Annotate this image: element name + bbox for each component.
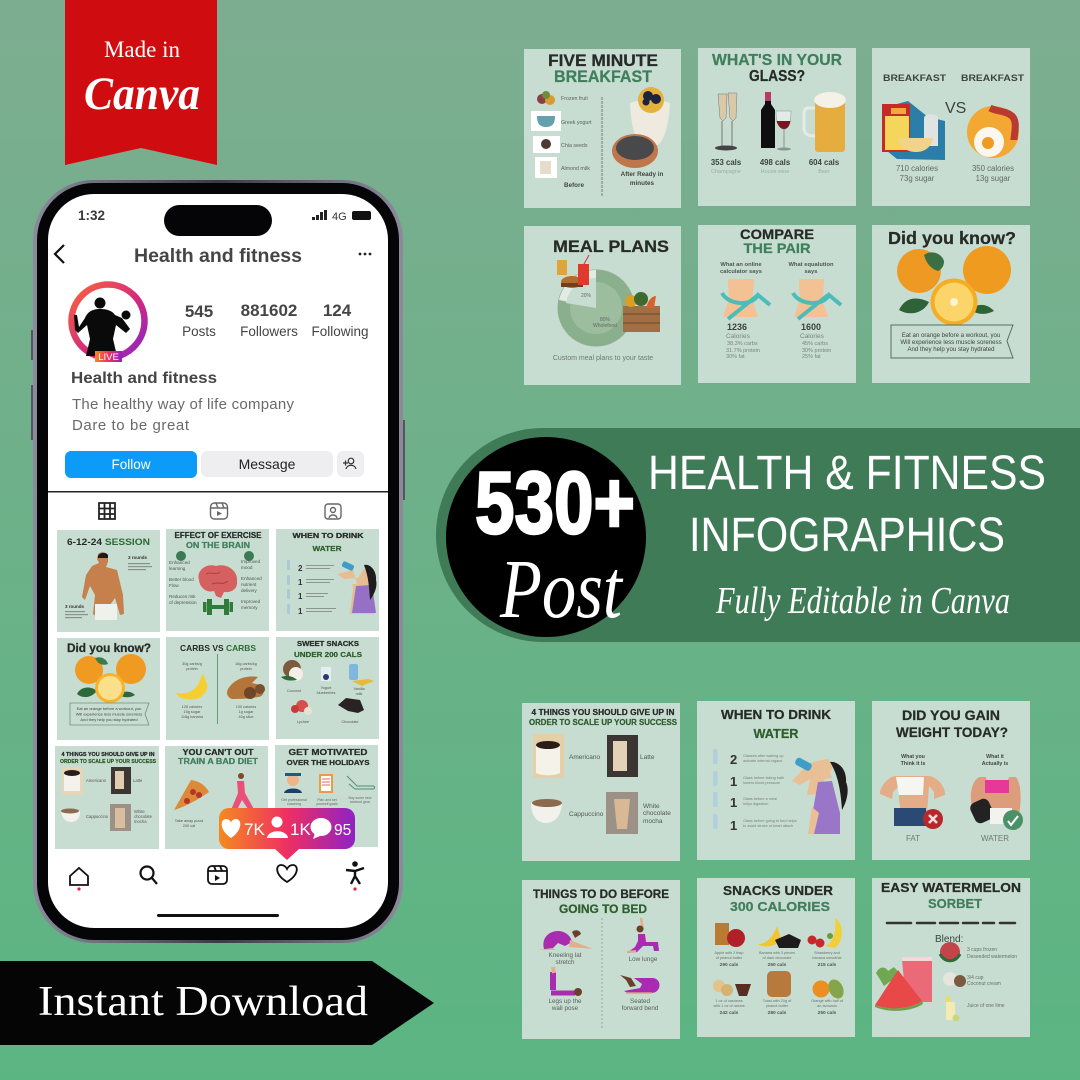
card: things to do before going to bed: forward bend xyxy=(622,1005,659,1012)
tile: carbs vs carbs: protein xyxy=(240,667,252,671)
engagement badge xyxy=(219,808,355,860)
card: breakfast vs breakfast: 13g sugar xyxy=(976,174,1011,183)
card: things to do before going to bed: Kneeling lat xyxy=(549,952,582,959)
black 530+ post badge xyxy=(446,437,646,637)
tile: carbs vs carbs: 100 calories xyxy=(236,705,256,709)
profile stats: 881602 xyxy=(241,301,297,320)
status bar: 1:32 xyxy=(78,208,105,223)
card: what's in your glass: Champagne xyxy=(711,169,741,175)
card: did you know: Eat an orange before a workout, you xyxy=(902,332,1000,339)
card: did you gain weight today: FAT xyxy=(906,834,920,843)
tile: get motivated over the holidays: workout gear xyxy=(350,800,371,804)
card: things to do before going to bed: wall pose xyxy=(551,1005,579,1012)
card: breakfast vs breakfast: BREAKFAST xyxy=(883,73,946,83)
tile: sweet snacks under 200 cals: UNDER 200 CALS xyxy=(294,650,362,659)
card: did you gain weight today: Actually is xyxy=(982,761,1008,767)
card: what's in your glass xyxy=(698,48,856,206)
tile: did you know: And they help you stay hydrated xyxy=(80,717,138,722)
card: compare the pair: calculator says xyxy=(720,269,762,275)
card: compare the pair: 30% protein xyxy=(802,348,831,354)
tile: 6-12-24 session: 3 rounds xyxy=(65,604,84,609)
card: things to do before going to bed: stretch xyxy=(556,959,575,966)
tile: when to drink water: 2 xyxy=(298,564,303,573)
card: did you gain weight today xyxy=(872,701,1030,860)
card: things to do before going to bed: Seated xyxy=(630,998,650,1005)
card: easy watermelon sorbet: SORBET xyxy=(928,896,982,911)
card: snacks under 300 calories: 290 cals xyxy=(720,962,739,968)
phone mockup xyxy=(31,180,405,943)
card: when to drink water: Glass before a meal xyxy=(743,797,777,801)
tile: 6-12-24 session: 3 rounds xyxy=(128,555,147,560)
card: when to drink water xyxy=(697,701,855,860)
status bar: 4G xyxy=(332,211,347,223)
tile: sweet snacks under 200 cals: SWEET SNACKS xyxy=(297,639,359,648)
card: snacks under 300 calories: Strawberry and xyxy=(814,951,840,955)
tile: effect of exercise on the brain: ON THE BRAIN xyxy=(186,541,250,550)
tile: carbs vs carbs: 16g carbs/kg xyxy=(235,662,257,666)
tile: effect of exercise on the brain xyxy=(166,529,269,631)
card: five minute breakfast: Chia seeds xyxy=(561,143,588,149)
card: when to drink water: Glasses after waking up xyxy=(743,754,784,758)
tile: 4 things to give up: mocha xyxy=(134,819,147,824)
tile: get motivated over the holidays: OVER THE HOLIDAYS xyxy=(286,758,370,767)
card: breakfast vs breakfast: VS xyxy=(945,100,966,117)
profile stats: Followers xyxy=(240,324,298,339)
card: what's in your glass: WHAT'S IN YOUR xyxy=(712,52,842,69)
card: did you gain weight today: WATER xyxy=(981,834,1009,843)
card: five minute breakfast: After Ready in xyxy=(621,171,663,178)
tile: carbs vs carbs: 126 calories xyxy=(182,705,202,709)
tile: you can't out train a bad diet: YOU CAN'T OUT xyxy=(182,748,254,757)
tile: sweet snacks under 200 cals: Vanilla xyxy=(353,687,365,691)
tile: 4 things to give up: Latte xyxy=(133,778,143,783)
tile: carbs vs carbs: protein xyxy=(186,667,198,671)
tile: effect of exercise on the brain: learning xyxy=(169,566,186,571)
tile: get motivated over the holidays: yourself goals xyxy=(316,802,338,806)
card: 4 things to give up xyxy=(522,703,680,861)
card: when to drink water: WHEN TO DRINK xyxy=(721,708,831,722)
card: when to drink water: 2 xyxy=(730,752,737,767)
card: meal plans: Custom meal plans to your taste xyxy=(553,355,653,362)
card: snacks under 300 calories xyxy=(697,878,855,1037)
card: breakfast vs breakfast: 710 calories xyxy=(896,164,938,173)
profile bio: The healthy way of life company xyxy=(72,396,294,413)
profile stats: 545 xyxy=(185,302,213,321)
tile: you can't out train a bad diet xyxy=(165,746,268,849)
avatar with live ring xyxy=(72,284,144,363)
tile: carbs vs carbs: 30g carbs/g xyxy=(182,662,202,666)
pose: seated forward bend xyxy=(620,975,660,993)
profile bio: Dare to be great xyxy=(72,417,190,434)
banner heading: Fully Editable in Canva xyxy=(715,580,1010,622)
tile: carbs vs carbs: 118g banana xyxy=(181,715,204,719)
follow and message buttons xyxy=(65,451,364,478)
engagement badge: 7K xyxy=(244,820,265,839)
black 530+ post badge: 530+ xyxy=(475,453,635,552)
card: what's in your glass: GLASS? xyxy=(749,68,805,85)
profile tabs xyxy=(99,503,341,519)
tile: 6-12-24 session xyxy=(57,530,160,632)
red Made in Canva ribbon: Made in xyxy=(104,37,180,62)
card: compare the pair: 1600 xyxy=(801,322,821,332)
card: compare the pair: says xyxy=(805,269,817,275)
follow and message buttons: Message xyxy=(239,456,296,472)
tile: 6-12-24 session: 6-12-24 SESSION xyxy=(67,537,150,547)
bottom navigation xyxy=(70,861,364,917)
card: snacks under 300 calories: 215 cals xyxy=(818,962,837,968)
pose: low lunge xyxy=(627,918,659,953)
card: when to drink water: lowers blood pressure xyxy=(743,781,780,785)
tile: effect of exercise on the brain: Enhanced xyxy=(169,560,190,565)
tile: sweet snacks under 200 cals: milk xyxy=(356,692,362,696)
tile: get motivated over the holidays: Plan and set xyxy=(317,798,337,802)
card: five minute breakfast xyxy=(524,49,681,208)
card: things to do before going to bed: Low lunge xyxy=(629,956,658,963)
card: meal plans: MEAL PLANS xyxy=(553,237,669,256)
card: snacks under 300 calories: Banana with 3 pieces xyxy=(759,951,795,955)
tile: get motivated over the holidays: Get professional xyxy=(281,798,307,802)
profile stats: Posts xyxy=(182,324,216,339)
card: 4 things to give up: 4 THINGS YOU SHOULD GIVE UP IN xyxy=(532,708,675,717)
card: five minute breakfast: BREAKFAST xyxy=(554,67,653,86)
card: 4 things to give up: chocolate xyxy=(643,810,671,817)
card: what's in your glass: House wine xyxy=(761,169,789,175)
tile: effect of exercise on the brain: nutrient xyxy=(241,582,257,587)
tile: effect of exercise on the brain: Reduces risk xyxy=(169,594,196,599)
card: snacks under 300 calories: 250 cals xyxy=(768,962,787,968)
card: compare the pair: 1236 xyxy=(727,322,747,332)
card: compare the pair: 38.3% carbs xyxy=(727,341,758,347)
card: did you know: And they help you stay hydrated xyxy=(907,346,995,353)
tile: 4 things to give up: Cappuccino xyxy=(86,814,109,819)
card: did you gain weight today: What you xyxy=(901,754,925,760)
card: snacks under 300 calories: peanut butter xyxy=(766,1004,789,1008)
tile: when to drink water: WHEN TO DRINK xyxy=(292,531,364,540)
tile: when to drink water: 1 xyxy=(298,592,303,601)
card: things to do before going to bed: Legs up the xyxy=(549,998,582,1005)
card: snacks under 300 calories: SNACKS UNDER xyxy=(723,883,834,898)
card: snacks under 300 calories: Toast with 20g of xyxy=(763,999,792,1003)
card: five minute breakfast: Before xyxy=(564,182,584,189)
card: snacks under 300 calories: of dark chocolate xyxy=(763,956,791,960)
card: breakfast vs breakfast: 350 calories xyxy=(972,164,1014,173)
card: when to drink water: Glass before going to bed helps xyxy=(743,819,797,823)
card: compare the pair: 31.7% protein xyxy=(726,348,760,354)
tile: when to drink water: WATER xyxy=(312,544,342,553)
card: snacks under 300 calories: with 1 oz of raisins xyxy=(713,1004,745,1008)
card: 4 things to give up: Cappuccino xyxy=(569,811,604,818)
card: 4 things to give up: mocha xyxy=(643,818,663,825)
profile stats: 124 xyxy=(323,301,352,320)
profile header: Health and fitness xyxy=(134,246,302,267)
tile: you can't out train a bad diet: TRAIN A BAD DIET xyxy=(178,757,258,766)
card: things to do before going to bed xyxy=(522,880,680,1039)
pose: kneeling lat stretch xyxy=(538,930,593,950)
instant download arrow xyxy=(0,961,434,1045)
card: snacks under 300 calories: an avocado xyxy=(817,1004,837,1008)
tile: sweet snacks under 200 cals: Chocolate xyxy=(341,720,359,724)
card: compare the pair: 25% fat xyxy=(802,354,821,360)
tile: sweet snacks under 200 cals: Coconut xyxy=(287,689,302,693)
engagement badge: 95 xyxy=(334,822,351,839)
card: when to drink water: helps digestion xyxy=(743,802,768,806)
card: compare the pair: COMPARE xyxy=(740,226,814,242)
tile: 4 things to give up: ORDER TO SCALE UP YOUR SUCCESS xyxy=(60,759,156,765)
card: did you gain weight today: What it xyxy=(986,754,1004,760)
card: 4 things to give up: ORDER TO SCALE UP YOUR SUCCESS xyxy=(529,718,677,727)
card: did you gain weight today: WEIGHT TODAY? xyxy=(896,725,1008,740)
card: compare the pair: THE PAIR xyxy=(744,240,810,256)
tile: when to drink water: 1 xyxy=(298,607,303,616)
card: what's in your glass: Beer xyxy=(818,169,830,175)
card: compare the pair: 45% carbs xyxy=(802,341,828,347)
card: meal plans xyxy=(524,226,681,385)
tile: did you know: Will experience less muscle soreness xyxy=(76,712,142,716)
card: what's in your glass: 353 cals xyxy=(711,158,742,167)
card: snacks under 300 calories: 250 cals xyxy=(818,1010,837,1016)
card: easy watermelon sorbet: Blend: xyxy=(935,934,963,945)
tile: did you know: Eat an orange before a workout, you xyxy=(77,706,141,711)
tile: effect of exercise on the brain: delivery xyxy=(241,588,258,593)
profile stats xyxy=(182,301,369,339)
card: when to drink water: to avoid stroke or heart attack xyxy=(743,824,793,828)
banner heading xyxy=(648,447,1046,622)
engagement badge: 1K xyxy=(290,820,311,839)
card: when to drink water: WATER xyxy=(754,727,798,741)
card: did you know: Will experience less muscle soreness xyxy=(900,339,1002,346)
card: when to drink water: activate internal organs xyxy=(743,759,782,763)
tile: 4 things to give up xyxy=(55,746,159,849)
profile bio xyxy=(71,370,294,434)
tile: carbs vs carbs: 40g slice xyxy=(238,715,254,719)
tile: get motivated over the holidays: Buy some new xyxy=(349,796,372,800)
tile: you can't out train a bad diet: 200 cal xyxy=(183,823,195,828)
profile bio: Health and fitness xyxy=(71,370,217,387)
card: easy watermelon sorbet: EASY WATERMELON xyxy=(881,880,1021,895)
profile header xyxy=(55,245,371,267)
card: snacks under 300 calories: 242 cals xyxy=(720,1010,739,1016)
card: things to do before going to bed: GOING TO BED xyxy=(559,904,647,916)
profile stats: Following xyxy=(311,324,369,339)
pose: legs up the wall xyxy=(551,967,582,996)
tile: sweet snacks under 200 cals: Lychee xyxy=(297,720,309,724)
card: breakfast vs breakfast xyxy=(872,48,1030,206)
tile: effect of exercise on the brain: EFFECT OF EXERCISE xyxy=(174,531,262,540)
card: easy watermelon sorbet: Coconut cream xyxy=(967,981,1001,987)
tile: carbs vs carbs: 1g sugar xyxy=(239,710,254,714)
card: compare the pair xyxy=(698,225,856,383)
avatar with live ring: LIVE xyxy=(98,352,119,363)
tile: sweet snacks under 200 cals: Yogurt xyxy=(321,686,332,690)
card: breakfast vs breakfast: 73g sugar xyxy=(900,174,935,183)
card: meal plans: 20% xyxy=(581,293,592,299)
card: compare the pair: Calories xyxy=(800,333,825,340)
tile: effect of exercise on the brain: Better blood xyxy=(169,577,194,582)
card: 4 things to give up: Latte xyxy=(640,754,655,761)
card: compare the pair: Calories xyxy=(726,333,751,340)
card: what's in your glass: 604 cals xyxy=(809,158,840,167)
card: easy watermelon sorbet xyxy=(872,878,1030,1037)
card: when to drink water: 1 xyxy=(730,774,737,789)
tile: carbs vs carbs: 15g sugar xyxy=(184,710,201,714)
card: meal plans: 80% xyxy=(600,317,611,323)
card: when to drink water: Glass before taking bath xyxy=(743,776,784,780)
card: five minute breakfast: Greek yogurt xyxy=(561,120,592,126)
card: compare the pair: 30% fat xyxy=(726,354,745,360)
card: 4 things to give up: Americano xyxy=(569,754,600,761)
card: snacks under 300 calories: 300 CALORIES xyxy=(730,899,830,914)
tile: get motivated over the holidays: coaching xyxy=(287,802,301,806)
card: when to drink water: 1 xyxy=(730,795,737,810)
tile: 4 things to give up: 4 THINGS YOU SHOULD GIVE UP IN xyxy=(62,752,155,758)
red Made in Canva ribbon: Canva xyxy=(84,68,200,120)
tile: get motivated over the holidays: GET MOTIVATED xyxy=(288,747,368,757)
tile: effect of exercise on the brain: Flow xyxy=(169,583,179,588)
card: meal plans: Wholefood xyxy=(593,323,617,329)
tile: effect of exercise on the brain: Enhanced xyxy=(241,576,262,581)
instant download arrow: Instant Download xyxy=(38,979,368,1025)
tile: effect of exercise on the brain: mood xyxy=(241,565,253,570)
tile: effect of exercise on the brain: of depression xyxy=(169,600,197,605)
tile: sweet snacks under 200 cals xyxy=(276,637,379,739)
tile: when to drink water: 1 xyxy=(298,578,303,587)
banner xyxy=(436,428,1080,642)
tile: you can't out train a bad diet: Take away pizza xyxy=(175,818,204,823)
card: did you gain weight today: Think it is xyxy=(901,761,925,767)
card: snacks under 300 calories: Apple with 2 tbsp xyxy=(715,951,743,955)
card: snacks under 300 calories: of peanut butter xyxy=(716,956,743,960)
card: easy watermelon sorbet: Juice of one lime xyxy=(967,1003,1005,1009)
card: five minute breakfast: Frozen fruit xyxy=(561,96,588,102)
card: easy watermelon sorbet: Deseeded watermelon xyxy=(967,954,1017,960)
card: what's in your glass: 498 cals xyxy=(760,158,791,167)
tile: did you know xyxy=(57,638,160,740)
tile: get motivated over the holidays xyxy=(275,745,378,847)
card: five minute breakfast: FIVE MINUTE xyxy=(548,51,658,70)
tile: carbs vs carbs xyxy=(166,637,269,740)
card: things to do before going to bed: THINGS TO DO BEFORE xyxy=(533,889,669,901)
tile: effect of exercise on the brain: memory xyxy=(241,605,258,610)
card: compare the pair: What equalution xyxy=(788,262,834,268)
card: 4 things to give up: White xyxy=(643,803,660,810)
card: did you know: Did you know? xyxy=(888,228,1016,248)
banner heading: INFOGRAPHICS xyxy=(689,509,1005,562)
red Made in Canva ribbon xyxy=(65,0,217,165)
card: did you know xyxy=(872,225,1030,383)
tile: 4 things to give up: Americano xyxy=(86,778,107,783)
card: when to drink water: 1 xyxy=(730,818,737,833)
card: did you gain weight today: DID YOU GAIN xyxy=(902,708,1000,723)
card: breakfast vs breakfast: BREAKFAST xyxy=(961,73,1024,83)
card: snacks under 300 calories: banana smoothie xyxy=(812,956,842,960)
tile: effect of exercise on the brain: Improved xyxy=(241,599,261,604)
card: snacks under 300 calories: 1 oz of cashews xyxy=(715,999,743,1003)
card: easy watermelon sorbet: 3/4 cup xyxy=(967,975,984,981)
card: compare the pair: What an online xyxy=(720,262,762,268)
tile: carbs vs carbs: CARBS VS CARBS xyxy=(180,643,256,653)
tile: 4 things to give up: White xyxy=(134,809,145,814)
card: snacks under 300 calories: Orange with half of xyxy=(811,999,844,1003)
card: snacks under 300 calories: 280 cals xyxy=(768,1010,787,1016)
black 530+ post badge: Post xyxy=(499,543,624,636)
tile: sweet snacks under 200 cals: blueberries xyxy=(317,691,335,695)
card: five minute breakfast: minutes xyxy=(630,180,655,187)
tile: did you know: Did you know? xyxy=(67,643,151,655)
tile: 4 things to give up: chocolate xyxy=(134,814,153,819)
tile: effect of exercise on the brain: Improved xyxy=(241,559,261,564)
card: five minute breakfast: Almond milk xyxy=(561,166,590,172)
card: easy watermelon sorbet: 3 cups frozen xyxy=(967,947,997,953)
status bar xyxy=(78,205,371,236)
tile: when to drink water xyxy=(276,529,379,631)
follow and message buttons: Follow xyxy=(111,457,151,472)
